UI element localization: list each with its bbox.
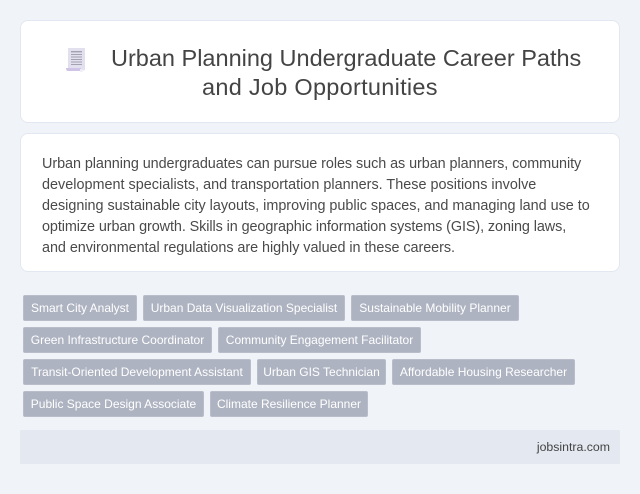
description text: optimize urban growth. Skills in geographic information systems (GIS), zoning laws, [42,219,566,235]
tag [218,327,421,353]
footer bar [20,430,620,464]
tag: Community Engagement Facilitator [226,333,413,347]
description text: Urban planning undergraduates can pursue roles such as urban planners, community [42,156,581,172]
title: and Job Opportunities [202,74,438,100]
tag: Green Infrastructure Coordinator [31,333,204,347]
tag: Transit-Oriented Development Assistant [31,365,243,379]
tag: Public Space Design Associate [31,397,196,411]
icon: document scroll [66,48,85,72]
tag: Sustainable Mobility Planner [359,301,511,315]
tag [257,359,386,385]
tag [23,391,204,417]
tag [351,295,519,321]
panel: title card [20,20,620,123]
tag: Urban GIS Technician [263,365,380,379]
tag: Affordable Housing Researcher [400,365,567,379]
tag [143,295,345,321]
tag: Smart City Analyst [31,301,129,315]
tag [23,295,137,321]
description text [42,156,590,256]
tag [392,359,575,385]
tag [23,359,251,385]
footer source text: jobsintra.com [537,440,610,454]
panel: description [20,133,620,272]
title [111,45,581,100]
description text: development specialists, and transportation planners. These positions involve [42,177,536,193]
description text: and environmental regulations are highly valued in these careers. [42,240,455,256]
description text: designing sustainable city layouts, improving public spaces, and managing land use to [42,198,590,214]
tag [210,391,368,417]
tag [23,327,212,353]
tag: Urban Data Visualization Specialist [151,301,337,315]
title: Urban Planning Undergraduate Career Paths [111,45,581,71]
panel: career tags [23,295,575,417]
tag: Climate Resilience Planner [217,397,361,411]
